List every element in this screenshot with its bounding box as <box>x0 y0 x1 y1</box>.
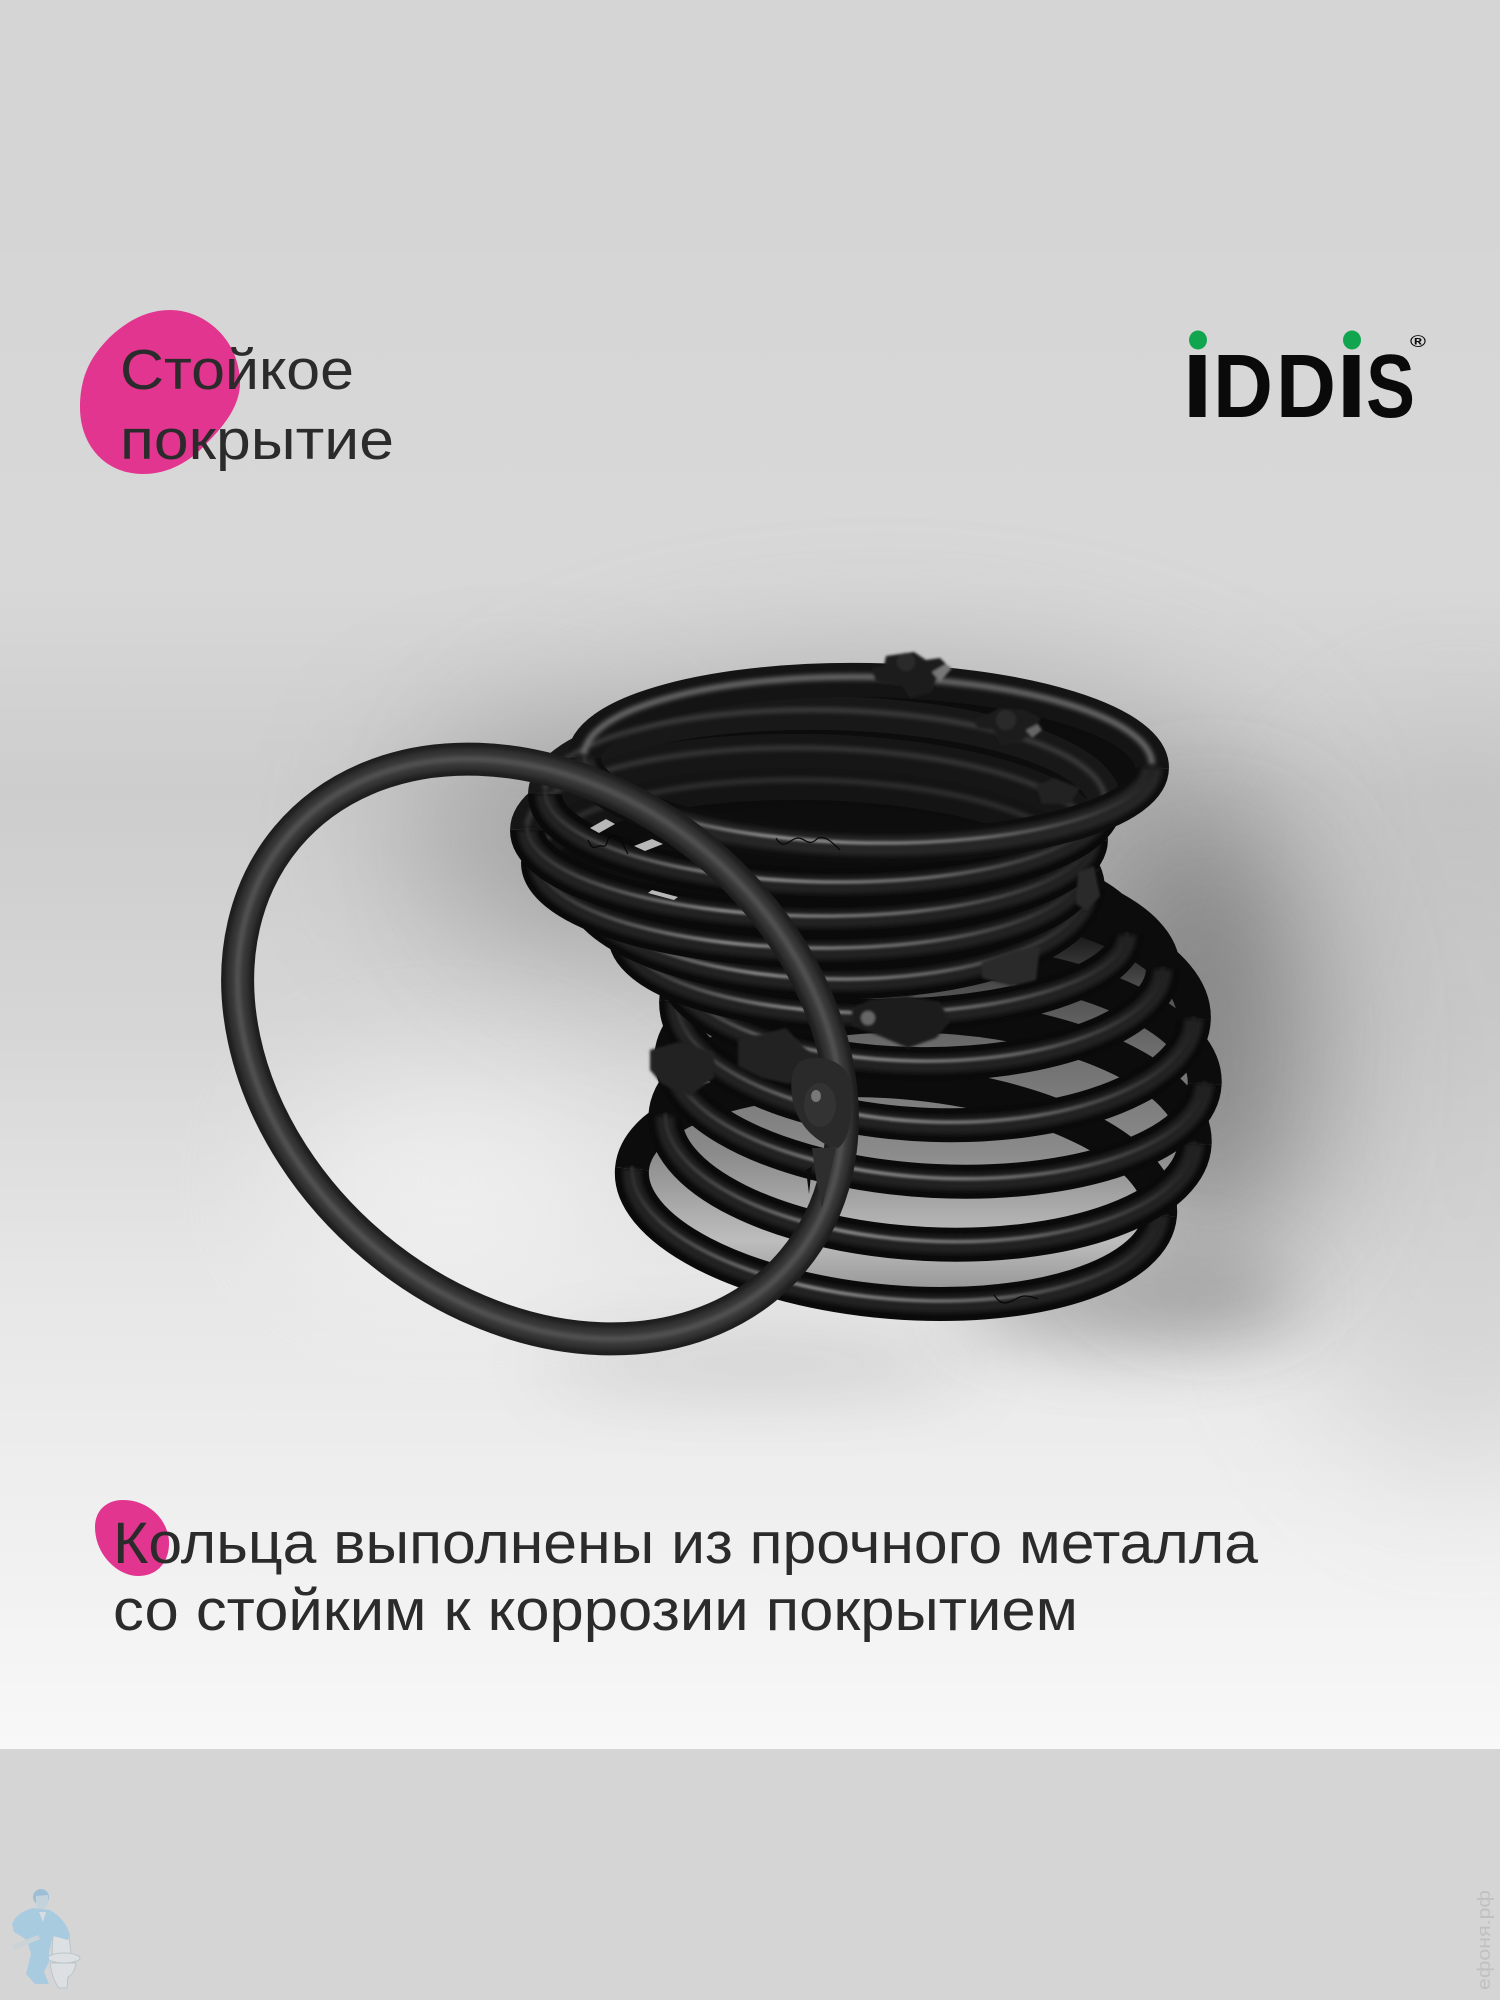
pink blob: body text accent <box>95 1500 169 1576</box>
heading: Стойкое <box>120 338 354 402</box>
ring 8 <box>672 998 1194 1134</box>
ring 5 <box>576 878 1088 986</box>
front ring with clasp <box>121 639 959 1459</box>
clasp 5 <box>982 946 1040 986</box>
product photo: stack of curtain rings <box>526 652 1210 1325</box>
logo dot right <box>1343 330 1361 350</box>
back arcs of the rings <box>527 675 1210 1215</box>
pink blob: heading accent <box>80 310 240 474</box>
clasp 7 <box>738 1028 814 1084</box>
back highlights <box>527 672 1153 869</box>
ring 4 <box>537 859 1082 956</box>
body text: со стойким к коррозии покрытием <box>113 1578 1078 1643</box>
clasp 3 <box>1036 778 1080 804</box>
ring 3 <box>526 827 1091 924</box>
logo: IDDIS <box>1182 330 1427 437</box>
ring 10 <box>659 1113 1195 1258</box>
plumber <box>12 1889 70 1984</box>
logo: IDDIS: D <box>1276 337 1336 437</box>
heading <box>120 338 394 472</box>
logo: IDDIS: I <box>1182 337 1213 437</box>
interior of the stack <box>527 680 1205 1302</box>
logo: IDDIS: I <box>1336 337 1367 437</box>
toilet <box>48 1934 80 1988</box>
logo: IDDIS: D <box>1213 337 1273 437</box>
clasp 2 <box>975 708 1042 746</box>
watermark site name: ефоня.рф <box>1474 1890 1494 1990</box>
logo: IDDIS: ® <box>1410 332 1427 351</box>
clasp 4 <box>1076 866 1100 910</box>
watermark icon: plumber with toilet <box>12 1889 80 1988</box>
ring 1 (top) <box>583 755 1152 851</box>
hairline seams on rings <box>588 836 1038 1303</box>
ring 6 <box>625 932 1127 1016</box>
body text: Кольца выполнены из прочного металла <box>113 1511 1259 1576</box>
panel: product photo background <box>0 623 1500 1749</box>
logo dot left <box>1189 330 1207 350</box>
ring 11 <box>622 1166 1160 1325</box>
body text <box>113 1511 1259 1643</box>
front ring clasp plate <box>791 1058 852 1208</box>
ring 7 <box>669 958 1163 1068</box>
ring 2 <box>544 791 1105 890</box>
heading: покрытие <box>120 408 394 472</box>
ring clasps <box>650 652 1100 1096</box>
logo: IDDIS: S <box>1366 337 1415 437</box>
clasp 6 <box>852 996 950 1048</box>
clasp 8 <box>650 1042 714 1096</box>
clasp 1 <box>872 652 952 698</box>
clasp rivet <box>804 1083 836 1127</box>
light gaps between rings <box>590 819 678 900</box>
ring 9 <box>666 1053 1205 1195</box>
